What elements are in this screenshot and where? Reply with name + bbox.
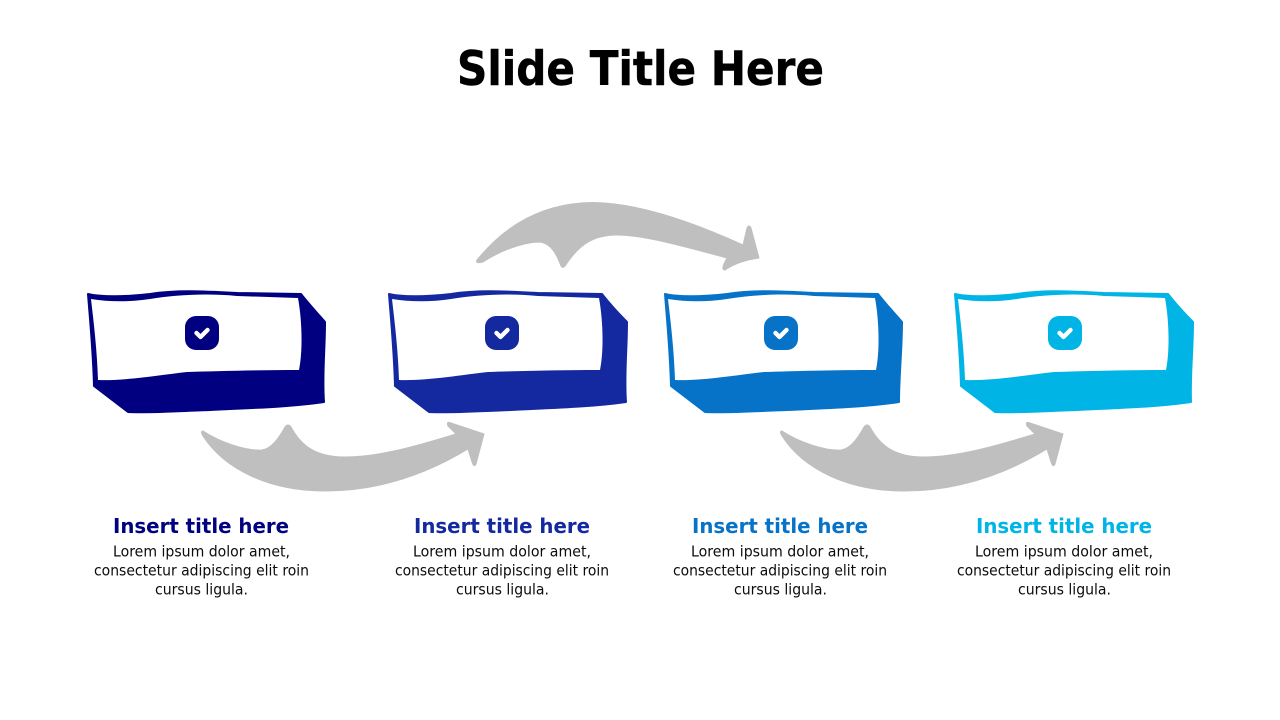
text block 2: cursus ligula. [456,580,549,598]
text block 3 [673,514,887,598]
text block 3: Insert title here [692,514,868,538]
text block 3: cursus ligula. [734,580,827,598]
text block 2: Insert title here [414,514,590,538]
text block 4: Insert title here [976,514,1152,538]
panel: box 3 [665,291,902,412]
text block 4: cursus ligula. [1018,580,1111,598]
icon: check badge [185,316,219,350]
text block 1: cursus ligula. [155,580,248,598]
text block 2: Lorem ipsum dolor amet, [413,542,591,560]
arrow: bottom curved from box 3 to box 4 [780,422,1063,491]
panel: box 1 [88,291,325,412]
icon: check badge [485,316,519,350]
text block 1: Insert title here [113,514,289,538]
panel: box 2 [389,291,627,412]
text block 1: Lorem ipsum dolor amet, [113,542,290,560]
text block 3: Lorem ipsum dolor amet, [691,542,869,560]
text block 1 [94,514,309,598]
text block 2 [395,514,609,598]
icon: check badge [1048,316,1082,350]
text block 3: consectetur adipiscing elit roin [673,562,887,580]
text block 4: Lorem ipsum dolor amet, [975,542,1153,560]
panel: box 4 [955,291,1193,412]
text block 4 [957,514,1171,598]
arrow: bottom curved from box 1 to box 2 [202,422,484,491]
arrow: top curved from box 2 to box 3 [477,202,759,270]
icon: check badge [764,316,798,350]
title: Slide Title Here [457,42,824,97]
text block 2: consectetur adipiscing elit roin [395,562,609,580]
text block 4: consectetur adipiscing elit roin [957,562,1171,580]
text block 1: consectetur adipiscing elit roin [94,562,309,580]
